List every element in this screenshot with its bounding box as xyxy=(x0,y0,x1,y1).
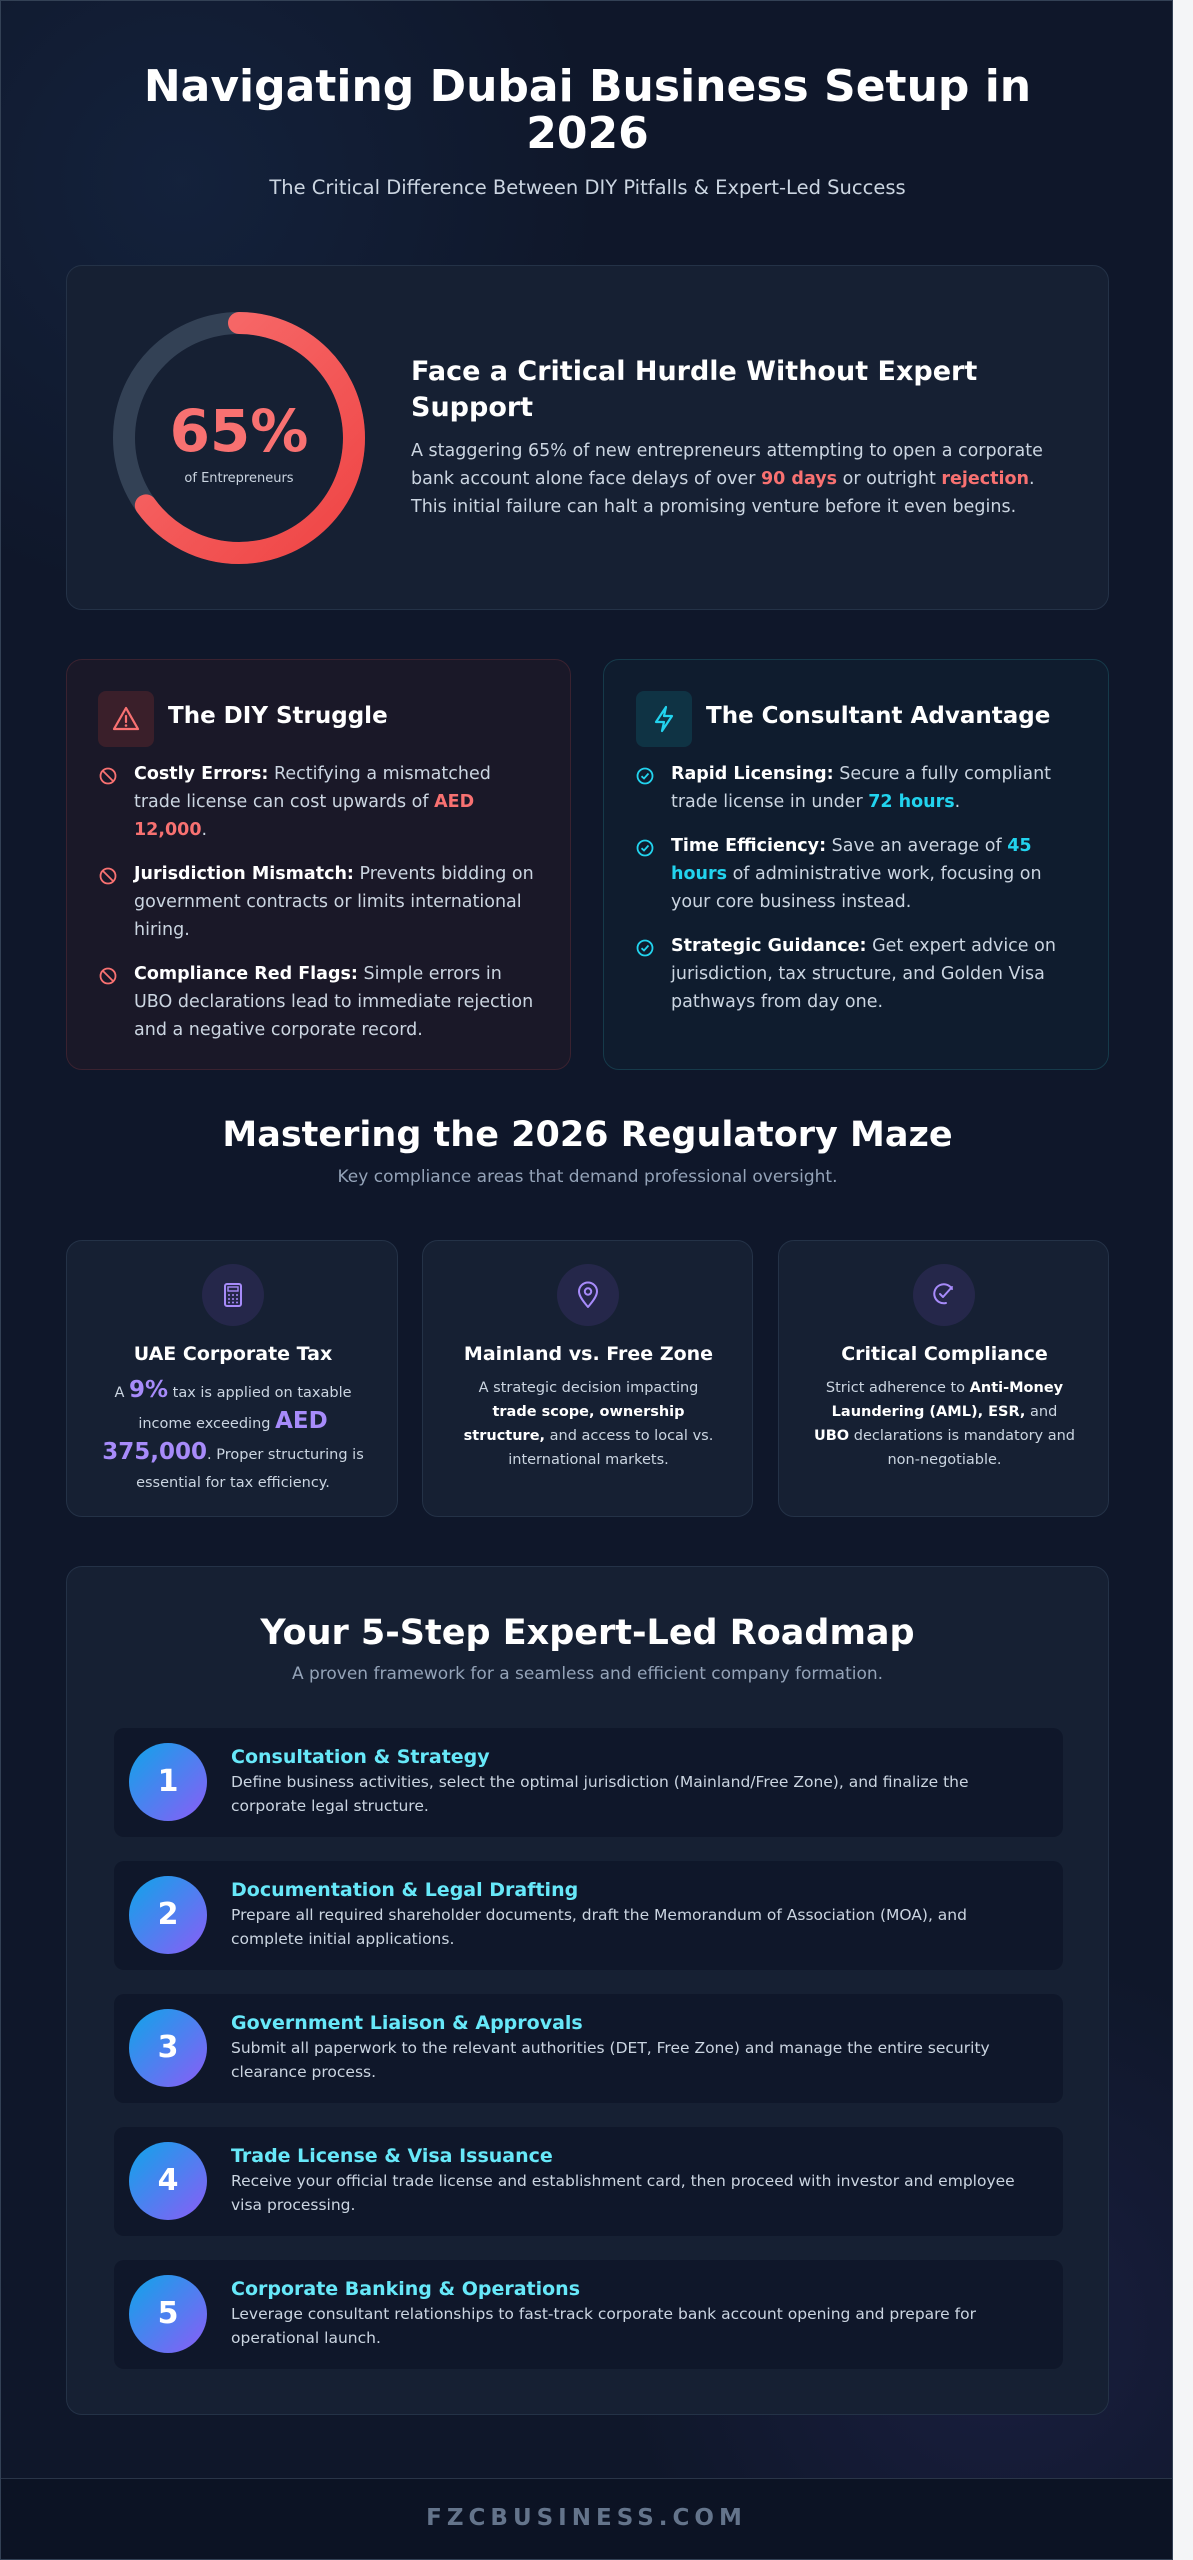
section subtitle: Key compliance areas that demand professional oversight. xyxy=(338,1167,838,1187)
step text: Government Liaison & Approvals xyxy=(231,2012,583,2034)
subtitle: A proven framework for a seamless and efficient company formation. xyxy=(292,1664,883,1684)
section heading: regulatory maze: Mastering the 2026 Regulatory Maze xyxy=(222,1115,953,1155)
panel: mainland vs free zone xyxy=(422,1240,753,1517)
list: struggles xyxy=(100,764,534,1040)
step 3 xyxy=(114,1994,1063,2103)
item: jurisdiction mismatch: Jurisdiction Mismatch: Prevents bidding on government contracts or limits international hiring. xyxy=(134,864,534,940)
step text: Documentation & Legal Drafting xyxy=(231,1879,578,1901)
item: compliance red flags: Compliance Red Flags: Simple errors in UBO declarations lead to immediate rejection and a negative corporate record. xyxy=(134,964,533,1040)
icon: map pin xyxy=(557,1264,619,1326)
number badge 1: 1 xyxy=(158,1764,178,1799)
icon: compliance badge xyxy=(913,1264,975,1326)
number badge 4: 4 xyxy=(158,2163,178,2198)
donut chart 65%: of Entrepreneurs xyxy=(184,471,294,486)
body: UBO declarations is mandatory and non-negotiable. xyxy=(814,1428,1075,1468)
step text: visa processing. xyxy=(231,2196,355,2214)
body: A 9% tax is applied on taxable income exceeding AED 375,000. Proper structuring is essential for tax efficiency. xyxy=(102,1377,364,1491)
step text: Define business activities, select the optimal jurisdiction (Mainland/Free Zone), and finalize the corporate legal structure. xyxy=(231,1773,969,1815)
step text: Trade License & Visa Issuance xyxy=(231,2145,553,2167)
step text xyxy=(231,1879,967,1948)
panel: critical compliance xyxy=(778,1240,1109,1517)
number badge 2: 2 xyxy=(158,1897,178,1932)
panel: 65% statistic xyxy=(66,265,1109,610)
item: strategic guidance: Strategic Guidance: Get expert advice on jurisdiction, tax structure, and Golden Visa pathways from day one. xyxy=(671,936,1056,1012)
body xyxy=(814,1380,1075,1468)
panel: DIY struggle xyxy=(66,659,571,1070)
item: costly errors: Costly Errors: Rectifying a mismatched trade license can cost upwards of AED 12,000. xyxy=(134,764,491,840)
footer xyxy=(1,2478,1174,2560)
subtitle: The Critical Difference Between DIY Pitfalls & Expert-Led Success xyxy=(269,176,906,199)
step 1 xyxy=(114,1728,1063,1837)
number badge 4 xyxy=(129,2142,207,2220)
step text xyxy=(231,1746,969,1815)
donut chart 65%: 65% xyxy=(170,397,308,465)
icon: calculator xyxy=(202,1264,264,1326)
step text: Leverage consultant relationships to fast-track corporate bank account opening and prepare for operational launch. xyxy=(231,2305,976,2347)
footer brand text: FZCBUSINESS.COM xyxy=(426,2505,747,2531)
step text xyxy=(231,2278,976,2347)
icon: lightning xyxy=(636,691,692,747)
panel: 5-step roadmap xyxy=(66,1566,1109,2415)
body text: A staggering 65% of new entrepreneurs attempting to open a corporate bank account alone face delays of over 90 days or outright rejection. This initial failure can halt a promising venture before it even begins. xyxy=(411,441,1043,517)
step text: Submit all paperwork to the relevant authorities (DET, Free Zone) and manage the entire security clearance process. xyxy=(231,2039,990,2081)
step text: Corporate Banking & Operations xyxy=(231,2278,580,2300)
title: UAE Corporate Tax xyxy=(134,1343,332,1365)
panel: corporate tax xyxy=(66,1240,398,1517)
title: Mainland vs. Free Zone xyxy=(464,1343,713,1365)
body: A strategic decision impacting trade scope, ownership structure, and access to local vs. international markets. xyxy=(464,1380,713,1468)
heading: Face a Critical Hurdle Without Expert Support xyxy=(411,356,977,423)
number badge 3 xyxy=(129,2009,207,2087)
heading: The Consultant Advantage xyxy=(706,703,1050,729)
number badge 1 xyxy=(129,1743,207,1821)
heading: Your 5-Step Expert-Led Roadmap xyxy=(260,1613,915,1653)
step text xyxy=(231,2145,1015,2214)
number badge 5 xyxy=(129,2275,207,2353)
item: rapid licensing: Rapid Licensing: Secure a fully compliant trade license in under 72 hours. xyxy=(671,764,1051,812)
item: time efficiency: Time Efficiency: Save an average of 45 hours of administrative work, focusing on your core business instead. xyxy=(671,836,1042,912)
list: advantages xyxy=(636,764,1056,1012)
step 4 xyxy=(114,2127,1063,2236)
heading: The DIY Struggle xyxy=(168,703,388,729)
number badge 2 xyxy=(129,1876,207,1954)
step 5 xyxy=(114,2260,1063,2369)
step text: Prepare all required shareholder documents, draft the Memorandum of Association (MOA), and complete initial applications. xyxy=(231,1906,967,1948)
number badge 3: 3 xyxy=(158,2030,178,2065)
title: Navigating Dubai Business Setup in 2026 xyxy=(144,61,1031,159)
title: Critical Compliance xyxy=(841,1343,1048,1365)
panel: consultant advantage xyxy=(603,659,1109,1070)
number badge 5: 5 xyxy=(158,2296,178,2331)
body: Strict adherence to Anti-Money Laundering (AML), ESR, and xyxy=(826,1380,1063,1420)
step text: Consultation & Strategy xyxy=(231,1746,490,1768)
step text xyxy=(231,2012,990,2081)
step text: Receive your official trade license and establishment card, then proceed with investor and employee xyxy=(231,2172,1015,2190)
step 2 xyxy=(114,1861,1063,1970)
icon: warning xyxy=(98,691,154,747)
donut chart 65% xyxy=(113,312,365,564)
